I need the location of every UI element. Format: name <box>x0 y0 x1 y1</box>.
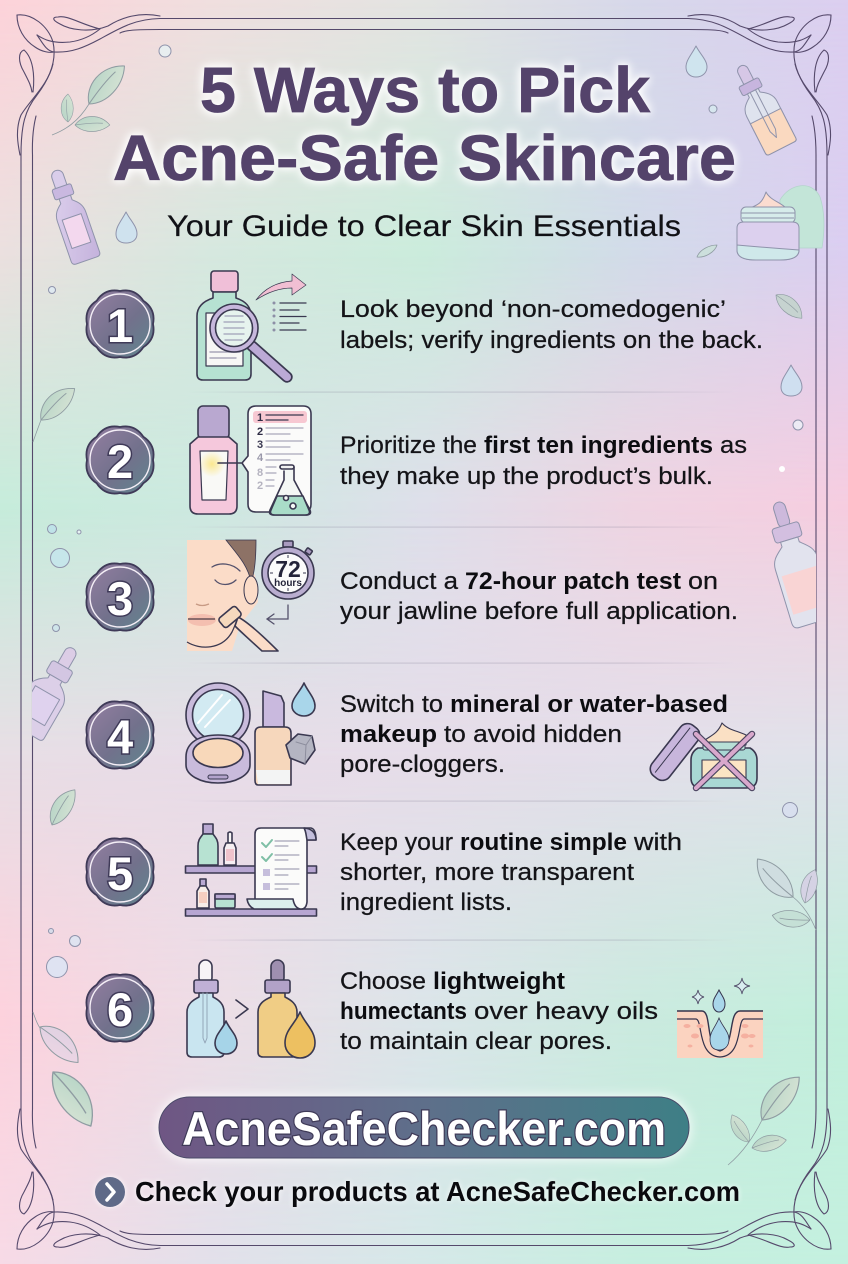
step 2 text: Prioritize the <box>340 432 477 459</box>
step 5 text: routine simple <box>460 829 627 856</box>
step 3 text: 72-hour patch test <box>465 568 681 595</box>
decoration: bubbles left <box>48 286 81 632</box>
step 2 text <box>340 432 747 490</box>
badge 2 <box>86 426 154 494</box>
step 4 text: mineral or water-based <box>450 691 728 718</box>
badge 6 <box>86 974 154 1042</box>
decoration: sparkle right <box>779 466 785 472</box>
step 1 text <box>340 296 763 354</box>
step 1 text: Look beyond ‘non-comedogenic’ <box>340 296 726 323</box>
icon: pink bottle and ingredient list: 2 <box>257 480 263 492</box>
step 5 text: shorter, more transparent <box>340 859 634 886</box>
badge 4 <box>86 701 154 769</box>
step 4 text <box>340 691 728 778</box>
decoration: bubbles lower left <box>46 928 80 978</box>
subtitle: Your Guide to Clear Skin Essentials <box>167 210 681 243</box>
step 4 text: Switch to <box>340 691 443 718</box>
icon: face patch test and stopwatch: hours <box>274 578 302 589</box>
decoration: bubble right lower <box>782 802 798 818</box>
badge 6: 6 <box>107 983 133 1036</box>
title: 5 Ways to Pick <box>200 54 650 126</box>
separators <box>185 392 735 941</box>
badge 2: 2 <box>107 435 133 488</box>
call-to-action pill: AcneSafeChecker.com <box>182 1102 666 1155</box>
decoration: leaf lower left <box>43 784 81 829</box>
icon: shelves and checklist <box>186 824 316 916</box>
icon: humectant vs oil bottles <box>187 960 315 1058</box>
step 3 text <box>340 568 738 625</box>
badge 4: 4 <box>107 710 133 763</box>
decoration: leaf sprig right <box>748 852 821 930</box>
step 5 text <box>340 829 682 916</box>
step 6 text: Choose <box>340 968 426 995</box>
decoration: leaf sprig bottom right <box>725 1068 807 1165</box>
icon: pink bottle and ingredient list: 3 <box>257 439 263 451</box>
decoration: bubble top <box>159 45 171 57</box>
decoration: leaf sprig left <box>33 380 81 442</box>
step 6 <box>86 960 763 1058</box>
step 6 text: lightweight <box>433 968 565 995</box>
step 4 text: to avoid hidden <box>444 721 622 748</box>
decoration: bubble top right <box>709 105 717 113</box>
icon: compact, foundation and mineral <box>186 683 315 785</box>
step 5 text: with <box>633 829 682 856</box>
title <box>113 54 736 194</box>
icon: pink bottle and ingredient list: 2 <box>257 426 263 438</box>
step 2 text: they make up the product’s bulk. <box>340 463 713 490</box>
decoration: dropper bottle top right <box>725 59 797 156</box>
step 3 text: on <box>688 568 718 595</box>
decoration: small leaf top right <box>697 245 717 257</box>
icon: skin pore with droplet <box>677 978 763 1058</box>
step 1 text: labels; verify ingredients on the back. <box>340 327 763 354</box>
icon: pink bottle and ingredient list: 8 <box>257 467 263 479</box>
step 2 text: first ten ingredients <box>484 432 713 459</box>
step 5 <box>86 824 682 916</box>
step 3 <box>86 540 738 651</box>
title: Acne-Safe Skincare <box>113 122 736 194</box>
step 1 <box>86 271 763 380</box>
step 5 text: ingredient lists. <box>340 889 512 916</box>
decoration: dropper bottle right <box>772 502 816 628</box>
icon: crossed-out cream jar <box>647 720 757 788</box>
badge 5: 5 <box>107 847 133 900</box>
step 4 <box>86 683 757 788</box>
decoration: serum bottle top left <box>42 166 101 265</box>
footer text: Check your products at AcneSafeChecker.com <box>135 1176 740 1207</box>
badge 1 <box>86 290 154 358</box>
icon: face patch test and stopwatch <box>187 540 314 651</box>
decoration: leaf upper right <box>772 289 808 323</box>
step 6 text: humectants <box>340 998 467 1025</box>
badge 3 <box>86 563 154 631</box>
decoration: bubble right <box>793 420 803 430</box>
step 6 text: to maintain clear pores. <box>340 1028 612 1055</box>
icon: pink bottle and ingredient list: 1 <box>257 412 263 424</box>
icon: pink bottle and ingredient list <box>190 406 311 515</box>
step 3 text: your jawline before full application. <box>340 598 738 625</box>
icon: pink bottle and ingredient list: 4 <box>257 452 264 464</box>
step 2 text: as <box>720 432 747 459</box>
icon: chevron button <box>95 1177 125 1207</box>
decoration: bottle left <box>32 647 76 741</box>
step 6 text: over heavy oils <box>474 998 658 1025</box>
decoration: leaves bottom left <box>33 1012 104 1133</box>
badge 3: 3 <box>107 572 133 625</box>
decoration: green blob behind jar <box>780 186 824 248</box>
step 3 text: Conduct a <box>340 568 459 595</box>
step 2 <box>86 406 747 515</box>
step 4 text: makeup <box>340 721 437 748</box>
decoration: leaf sprig top left <box>52 57 132 135</box>
footer line <box>95 1176 740 1207</box>
step 5 text: Keep your <box>340 829 453 856</box>
icon: face patch test and stopwatch: 72 <box>275 556 301 582</box>
badge 1: 1 <box>107 299 133 352</box>
badge 5 <box>86 838 154 906</box>
decoration: water drop left <box>116 212 137 243</box>
decoration: water drop top right <box>686 46 707 77</box>
step 4 text: pore-cloggers. <box>340 751 505 778</box>
decoration: cream jar top right <box>737 192 799 260</box>
icon: bottle under magnifier <box>197 271 306 380</box>
step 6 text <box>340 968 658 1055</box>
decoration: water drop right <box>781 365 802 396</box>
